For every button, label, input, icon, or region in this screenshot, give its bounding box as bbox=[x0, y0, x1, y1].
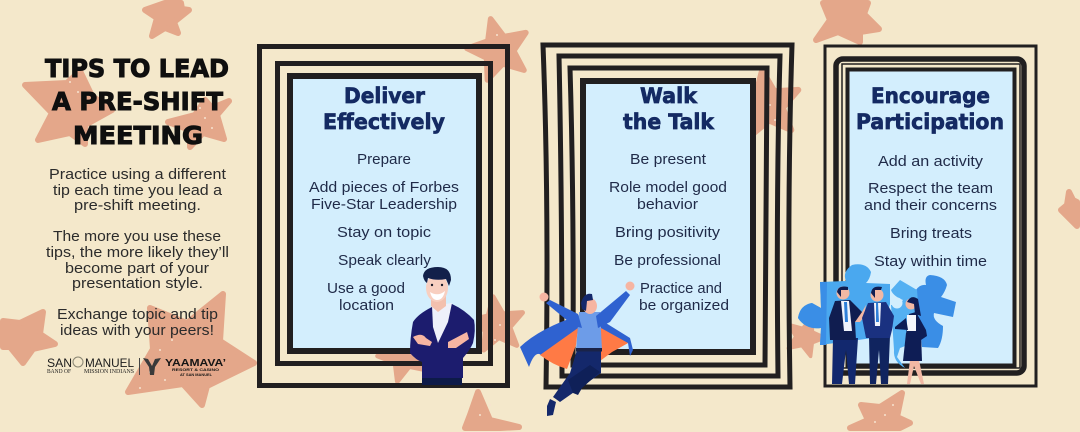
panel 3 heading: Participation bbox=[856, 110, 1004, 134]
man centre bbox=[862, 287, 894, 384]
panel: encourage participation bbox=[798, 46, 1036, 386]
logo: San Manuel: SAN bbox=[47, 356, 72, 370]
panel 1 tips: Add pieces of Forbes bbox=[309, 179, 459, 196]
panel 1 heading bbox=[323, 84, 445, 134]
panel 3 tips bbox=[864, 153, 997, 270]
logos bbox=[47, 356, 226, 377]
panel 2 heading: Walk bbox=[640, 84, 698, 108]
title: MEETING bbox=[73, 121, 203, 150]
second paragraph: presentation style. bbox=[72, 275, 203, 292]
panel 1 tips bbox=[309, 151, 459, 314]
third paragraph bbox=[57, 306, 218, 339]
logo: Yaamava bbox=[165, 357, 226, 377]
second paragraph bbox=[46, 228, 229, 292]
illustration: flying superhero man bbox=[520, 282, 634, 416]
panel 3 tips: and their concerns bbox=[864, 197, 997, 214]
panel 2 tips: be organized bbox=[639, 297, 729, 314]
illustration: team with puzzle pieces bbox=[798, 264, 956, 384]
panel 2 tips: Be professional bbox=[614, 252, 721, 269]
panel: walk the talk bbox=[520, 45, 792, 416]
second paragraph: The more you use these bbox=[53, 228, 221, 245]
panel 1 heading: Deliver bbox=[344, 84, 426, 108]
panel 1 tips: Stay on topic bbox=[337, 224, 432, 241]
panel 3 tips: Add an activity bbox=[878, 153, 984, 170]
title: A PRE-SHIFT bbox=[52, 87, 223, 116]
panel 1 tips: Prepare bbox=[357, 151, 411, 168]
panel 1 tips: Speak clearly bbox=[338, 252, 432, 269]
logo: San Manuel bbox=[47, 356, 134, 375]
intro text: Practice using a different bbox=[49, 166, 227, 183]
logo: San Manuel: MISSION INDIANS bbox=[84, 369, 134, 375]
panel 1 tips: Use a good bbox=[327, 280, 405, 297]
logo: San Manuel: MANUEL bbox=[85, 356, 134, 370]
logo: Y mark bbox=[143, 358, 161, 375]
third paragraph: Exchange topic and tip bbox=[57, 306, 218, 323]
intro text bbox=[49, 166, 227, 214]
panel 2 tips bbox=[609, 151, 729, 314]
man left bbox=[829, 286, 866, 384]
intro text: tip each time you lead a bbox=[53, 182, 223, 199]
logo: Yaamava: RESORT & CASINO bbox=[172, 367, 219, 372]
panel 3 tips: Respect the team bbox=[868, 180, 993, 197]
panel 2 tips: Practice and bbox=[640, 280, 722, 297]
panel 1 tips: Five-Star Leadership bbox=[311, 196, 457, 213]
panel: deliver effectively bbox=[260, 46, 508, 386]
panel 2 tips: Bring positivity bbox=[615, 224, 721, 241]
woman bbox=[895, 297, 927, 384]
panel 2 heading bbox=[623, 84, 715, 134]
panel 3 heading: Encourage bbox=[871, 84, 990, 108]
title bbox=[45, 54, 229, 150]
panel 2 tips: behavior bbox=[637, 196, 698, 213]
illustration: man with crossed arms bbox=[410, 267, 475, 385]
second paragraph: become part of your bbox=[65, 260, 209, 277]
panel 1 heading: Effectively bbox=[323, 110, 445, 134]
panel 2 tips: Be present bbox=[630, 151, 707, 168]
panel 3 tips: Stay within time bbox=[874, 253, 987, 270]
panel 1 frames bbox=[260, 46, 508, 386]
panel 3 tips: Bring treats bbox=[890, 225, 972, 242]
panel 3 frames bbox=[825, 46, 1036, 386]
third paragraph: ideas with your peers! bbox=[60, 322, 214, 339]
panel 2 heading: the Talk bbox=[623, 110, 715, 134]
logo: Yaamava: AT SAN MANUEL bbox=[180, 373, 213, 377]
intro text: pre-shift meeting. bbox=[74, 197, 201, 214]
logo: Yaamava: YAAMAVA’ bbox=[165, 357, 226, 369]
second paragraph: tips, the more likely they’ll bbox=[46, 244, 229, 261]
panel 2 tips: Role model good bbox=[609, 179, 727, 196]
title: TIPS TO LEAD bbox=[45, 54, 229, 83]
panel 1 tips: location bbox=[339, 297, 394, 314]
panel 2 frames bbox=[543, 45, 792, 387]
panel 3 heading bbox=[856, 84, 1004, 134]
logo: San Manuel: BAND OF bbox=[47, 369, 72, 375]
